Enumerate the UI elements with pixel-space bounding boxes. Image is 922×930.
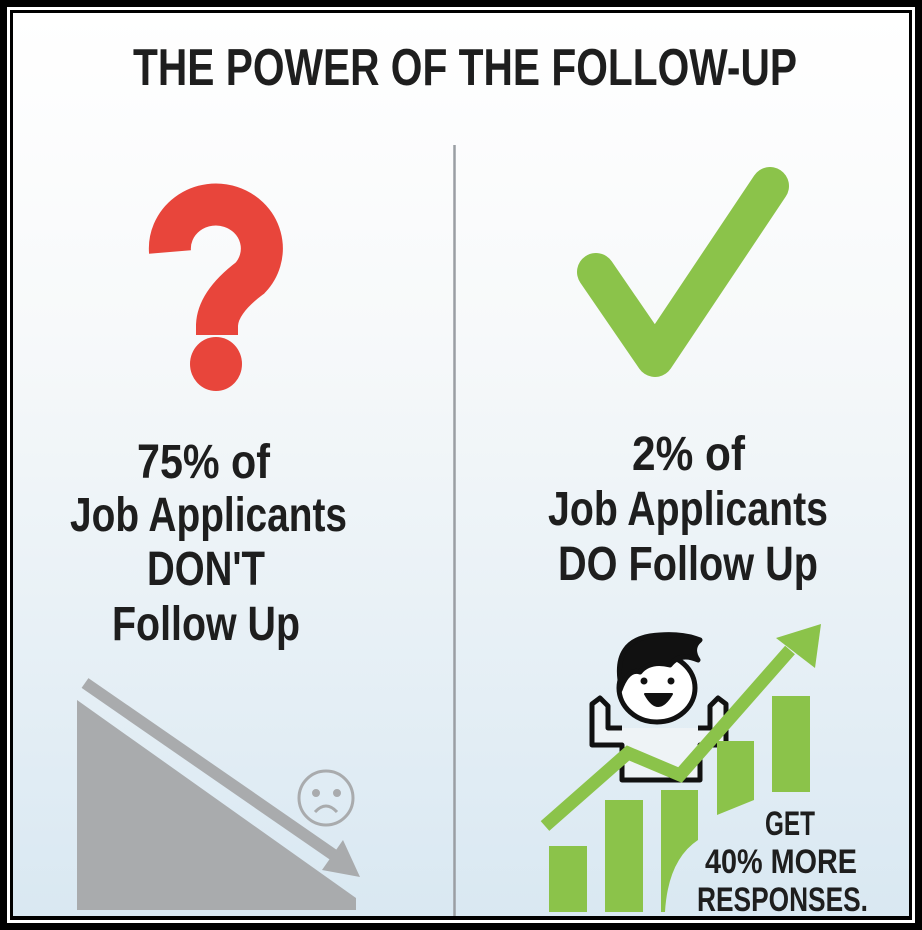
text: right stat	[548, 428, 828, 591]
callout text	[697, 805, 868, 919]
text: right stat: Job Applicants	[548, 483, 828, 536]
icon: happy person	[592, 635, 726, 780]
text: right stat: 2% of	[632, 428, 746, 481]
arrow: rising trend	[545, 624, 821, 826]
callout text: 40% MORE	[705, 843, 857, 881]
chart: declining slope	[77, 683, 360, 910]
icon: sad face	[299, 771, 353, 825]
callout text: RESPONSES.	[697, 881, 868, 919]
text: left stat: Job Applicants	[70, 489, 347, 542]
icon: check mark	[596, 186, 770, 358]
text: left stat: DON'T	[147, 543, 265, 596]
callout text: GET	[765, 805, 815, 843]
text: left stat: 75% of	[137, 436, 271, 489]
text: right stat: DO Follow Up	[558, 538, 818, 591]
text: left stat: Follow Up	[112, 598, 300, 651]
icon: question mark	[170, 205, 262, 391]
text: left stat	[70, 436, 347, 651]
chart: rising bars	[549, 696, 810, 912]
